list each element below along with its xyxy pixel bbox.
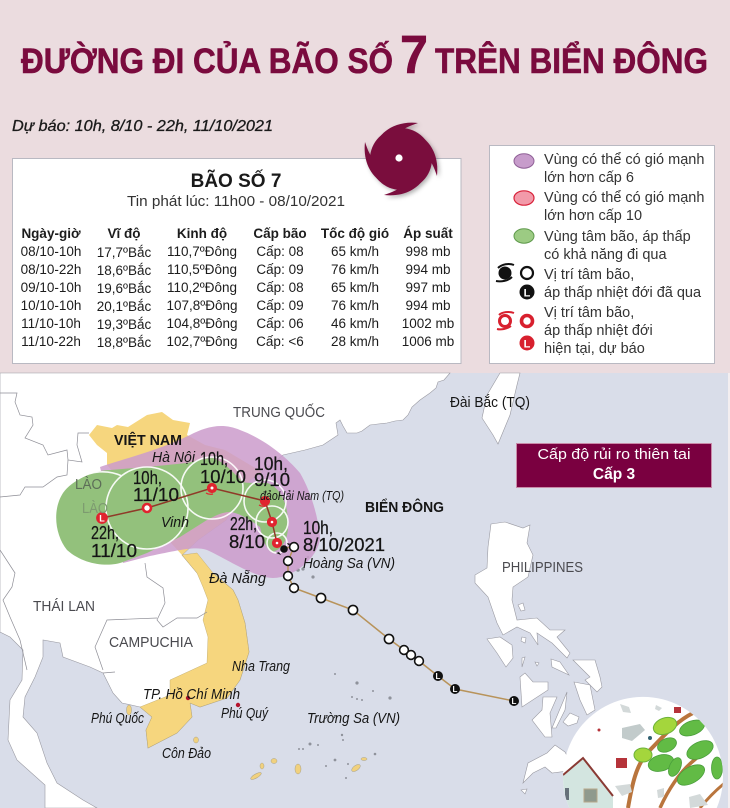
place labels: Vinh: [161, 515, 189, 531]
past position markers: [284, 543, 423, 665]
table data rows: 11/10-10h: [21, 316, 81, 331]
table data rows: Cấp: 06: [256, 316, 304, 331]
forecast time labels: 11/10: [133, 485, 179, 505]
legend: current and forecast positions: hiện tại, dự báo: [544, 341, 645, 357]
forecast period: Dự báo: 10h, 8/10 - 22h, 11/10/2021: [12, 118, 273, 135]
legend: past positions: [496, 264, 702, 301]
forecast position markers: [97, 483, 282, 548]
legend: past positions: Vị trí tâm bão,: [544, 267, 634, 283]
title: ĐƯỜNG ĐI CỦA BÃO SỐ: [21, 41, 393, 81]
forecast time labels: 22h,: [91, 523, 119, 543]
land: central and south Vietnam: [140, 553, 249, 748]
forecast time labels: 10h,: [254, 454, 288, 474]
forecast radius circles: [78, 457, 288, 553]
legend: strong wind above level 10: [514, 190, 704, 224]
label: Bien Dong: BIỂN ĐÔNG: [365, 498, 444, 516]
legend: current and forecast positions: áp thấp nhiệt đới: [544, 323, 653, 339]
table data rows: 18,6ºBắc: [97, 263, 151, 278]
table data rows: 11/10-22h: [21, 334, 81, 349]
label: Taipei: Đài Bắc (TQ): [450, 394, 530, 411]
city dots: [186, 696, 240, 707]
place labels: Đà Nẵng: [209, 570, 266, 587]
place labels: Nha Trang: [232, 659, 290, 675]
zone: strong wind above level 6: [100, 426, 320, 578]
country labels: TRUNG QUỐC: [233, 403, 325, 421]
label: Viet Nam: VIỆT NAM: [114, 431, 182, 449]
table data rows: 19,3ºBắc: [97, 317, 151, 332]
place labels: Côn Đảo: [162, 746, 211, 762]
sea: [0, 373, 728, 808]
legend: strong wind above level 10: lớn hơn cấp 10: [544, 208, 642, 224]
table data rows: 110,2ºĐông: [167, 280, 237, 295]
table data rows: Cấp: 08: [256, 244, 304, 259]
table data rows: 46 km/h: [331, 316, 379, 331]
table data rows: 994 mb: [405, 298, 451, 313]
legend: past positions: L: [524, 288, 531, 300]
place labels: TP. Hồ Chí Minh: [143, 687, 240, 703]
forecast time labels: 11/10: [91, 541, 137, 561]
forecast time labels: 10/10: [200, 467, 246, 487]
country labels: LÀO: [82, 500, 108, 517]
legend: strong wind above level 10: Vùng có thể có gió mạnh: [544, 190, 704, 206]
low pressure markers: L: [453, 685, 458, 694]
place labels: Phú Quốc: [91, 711, 145, 727]
low pressure markers: L: [512, 697, 517, 706]
legend: storm centre path zone: có khả năng đi qua: [544, 247, 667, 263]
callout: disaster risk level: Cấp 3: [593, 466, 635, 483]
illustration: storm-battered house and trees: [563, 697, 726, 808]
place labels: Hà Nội: [152, 450, 196, 466]
land: north Vietnam: [89, 412, 262, 555]
forecast time labels: 10h,: [133, 468, 162, 488]
forecast time labels: 10h,: [303, 518, 333, 538]
table header row: Tốc độ gió: [321, 226, 389, 241]
table header row: Vĩ độ: [108, 226, 140, 241]
legend: current and forecast positions: Vị trí tâm bão,: [544, 305, 634, 321]
table data rows: 09/10-10h: [21, 280, 81, 295]
table data rows: 998 mb: [405, 244, 451, 259]
table data rows: Cấp: <6: [256, 334, 304, 349]
zone: storm centre path: [56, 458, 288, 565]
table header row: [21, 226, 453, 241]
table data rows: 102,7ºĐông: [166, 334, 238, 349]
table data rows: [21, 244, 454, 350]
table data rows: 110,7ºĐông: [167, 244, 237, 259]
panel: storm data table: [12, 158, 461, 364]
title: 7: [400, 25, 428, 85]
table data rows: 65 km/h: [331, 280, 379, 295]
land: mainland: [0, 373, 450, 808]
callout: disaster risk level: [516, 444, 712, 488]
table header row: Kinh độ: [177, 226, 227, 241]
trees: [628, 713, 726, 808]
islands: scattered reefs: [296, 556, 392, 779]
table data rows: 65 km/h: [331, 244, 379, 259]
table data rows: 76 km/h: [331, 262, 379, 277]
table data rows: 104,8ºĐông: [166, 316, 238, 331]
table data rows: Cấp: 09: [256, 262, 304, 277]
table data rows: 1002 mb: [402, 316, 454, 331]
bulletin time: Tin phát lúc: 11h00 - 08/10/2021: [127, 194, 345, 210]
panel: legend: [490, 146, 714, 364]
legend: strong wind above level 6: [514, 152, 704, 186]
table header row: Cấp bão: [253, 226, 307, 241]
place labels: đảoHải Nam (TQ): [260, 489, 344, 503]
table data rows: 20,1ºBắc: [97, 299, 151, 314]
country borders: [0, 393, 207, 673]
callout: disaster risk level: Cấp độ rủi ro thiên tai: [538, 446, 690, 463]
table data rows: 08/10-10h: [21, 244, 81, 259]
legend: current and forecast positions: [497, 305, 653, 357]
legend: past positions: áp thấp nhiệt đới đã qua: [544, 285, 702, 301]
table data rows: 997 mb: [405, 280, 451, 295]
place labels: Phú Quý: [221, 706, 269, 722]
forecast storm track: [102, 488, 277, 543]
table data rows: 76 km/h: [331, 298, 379, 313]
table data rows: 1006 mb: [402, 334, 454, 349]
table data rows: 19,6ºBắc: [97, 281, 151, 296]
table data rows: 17,7ºBắc: [97, 245, 151, 260]
forecast time labels: 8/10/2021: [303, 535, 385, 555]
low pressure markers: [433, 671, 519, 706]
table data rows: 994 mb: [405, 262, 451, 277]
table heading: BÃO SỐ 7: [191, 170, 281, 192]
table data rows: 10/10-10h: [21, 298, 81, 313]
table data rows: 107,8ºĐông: [166, 298, 238, 313]
forecast position markers: L: [99, 514, 105, 524]
past storm track: [283, 547, 514, 701]
table data rows: 110,5ºĐông: [167, 262, 237, 277]
land: Philippines: [475, 522, 602, 794]
table data rows: 28 km/h: [331, 334, 379, 349]
country labels: PHILIPPINES: [502, 559, 583, 576]
house: [563, 758, 613, 808]
place labels: [91, 450, 400, 762]
current position marker: [276, 543, 291, 555]
place labels: Trường Sa (VN): [307, 711, 400, 727]
icon: typhoon symbol: [365, 123, 437, 195]
table data rows: 18,8ºBắc: [97, 335, 151, 350]
table data rows: 08/10-22h: [21, 262, 81, 277]
land: Taiwan: [482, 373, 520, 444]
title: TRÊN BIỂN ĐÔNG: [435, 41, 708, 81]
forecast time labels: 10h,: [200, 449, 228, 469]
forecast time labels: 8/10: [229, 532, 265, 552]
legend: strong wind above level 6: Vùng có thể có gió mạnh: [544, 152, 704, 168]
islands: Phu Quoc, Con Dao, Truong Sa: [126, 705, 367, 781]
low pressure markers: L: [436, 672, 441, 681]
legend: storm centre path zone: [514, 229, 691, 263]
title: [21, 25, 708, 85]
place labels: Hoàng Sa (VN): [303, 556, 395, 572]
table data rows: Cấp: 09: [256, 298, 304, 313]
country labels: CAMPUCHIA: [109, 634, 193, 651]
country labels: LÀO: [75, 476, 102, 493]
forecast time labels: 22h,: [230, 514, 257, 534]
table header row: Áp suất: [403, 226, 453, 241]
table header row: Ngày-giờ: [21, 226, 81, 241]
legend: strong wind above level 6: lớn hơn cấp 6: [544, 170, 634, 186]
panel: map: [0, 373, 730, 808]
legend: storm centre path zone: Vùng tâm bão, áp thấp: [544, 229, 691, 245]
forecast time labels: 9/10: [254, 470, 290, 490]
flying debris: [598, 704, 708, 808]
country labels: THÁI LAN: [33, 598, 95, 615]
legend: current and forecast positions: L: [524, 338, 531, 350]
table data rows: Cấp: 08: [256, 280, 304, 295]
country labels: [33, 403, 583, 651]
forecast time labels: [91, 449, 385, 561]
header background: [0, 0, 730, 373]
